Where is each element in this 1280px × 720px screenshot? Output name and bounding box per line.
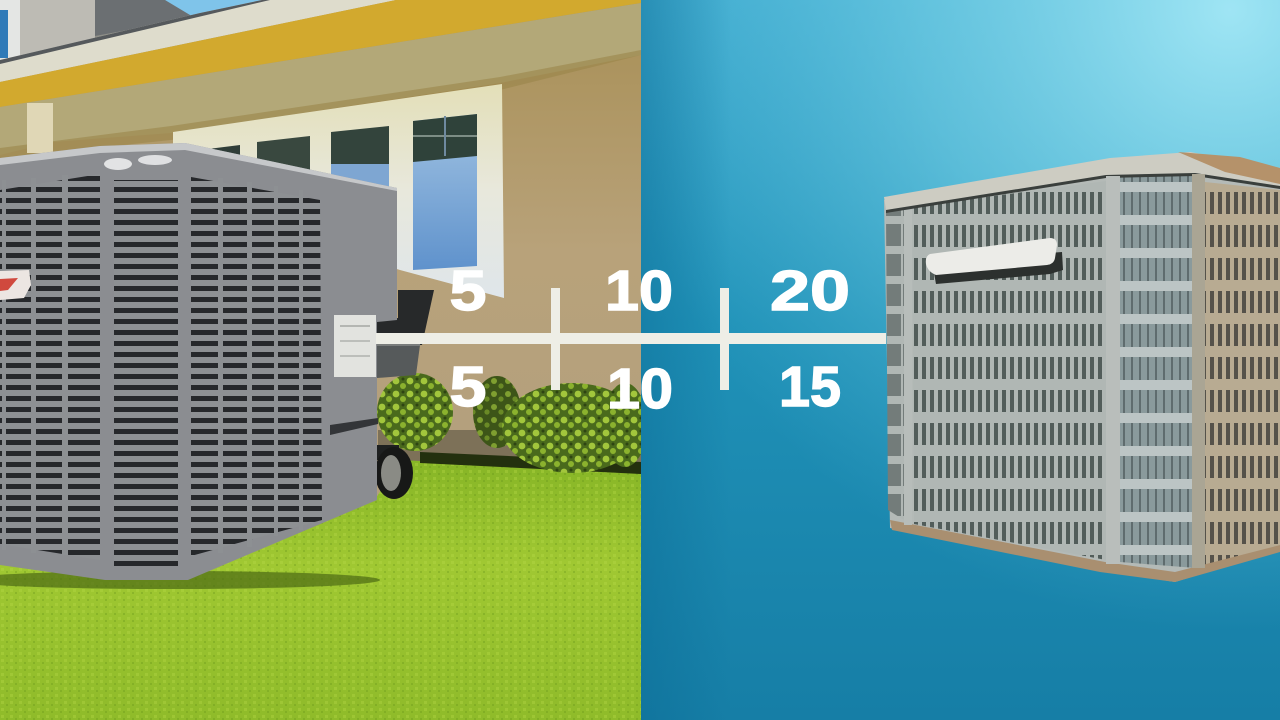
icon: front louvers xyxy=(0,174,322,566)
left corner grille xyxy=(886,210,904,520)
top lid xyxy=(884,152,1280,210)
lawn texture xyxy=(0,460,641,720)
corner grille xyxy=(1120,176,1196,568)
new AC unit xyxy=(0,143,397,589)
numbers above the line: 10 xyxy=(605,259,673,323)
front grille xyxy=(912,181,1106,560)
shrubs xyxy=(377,373,647,474)
service panel seam xyxy=(330,418,378,435)
numbers above the line: 5 xyxy=(450,259,486,323)
handle xyxy=(926,238,1057,275)
panel: house and new AC unit scene xyxy=(0,0,647,720)
bottom rust edge xyxy=(890,520,1280,582)
handle shadow xyxy=(932,252,1063,284)
timeline divider xyxy=(376,288,886,390)
lawn xyxy=(0,460,641,720)
posts xyxy=(1106,176,1120,564)
side grille xyxy=(1205,182,1280,566)
backdrop edge shade xyxy=(641,0,731,720)
roof fascia and soffit xyxy=(0,0,641,158)
backdrop glow xyxy=(641,0,1280,640)
rust on lid xyxy=(1178,152,1280,184)
old AC unit xyxy=(884,152,1280,582)
lid underside shadow xyxy=(886,173,1280,213)
numbers above the line: 20 xyxy=(770,259,850,323)
logo on hood xyxy=(104,155,172,170)
label sticker xyxy=(334,315,376,377)
brand badge xyxy=(0,270,31,300)
window xyxy=(173,84,504,298)
numbers below the line: 15 xyxy=(779,355,841,419)
numbers below the line: 5 xyxy=(450,355,486,419)
porch post xyxy=(27,103,53,153)
upper house and sky xyxy=(0,0,270,62)
lawn mower xyxy=(375,290,434,499)
numbers below the line xyxy=(450,355,841,421)
numbers below the line: 10 xyxy=(607,357,673,421)
numbers above the line xyxy=(450,259,850,323)
panel: blue backdrop with old AC unit xyxy=(641,0,1280,720)
wall base shadow xyxy=(378,430,641,466)
